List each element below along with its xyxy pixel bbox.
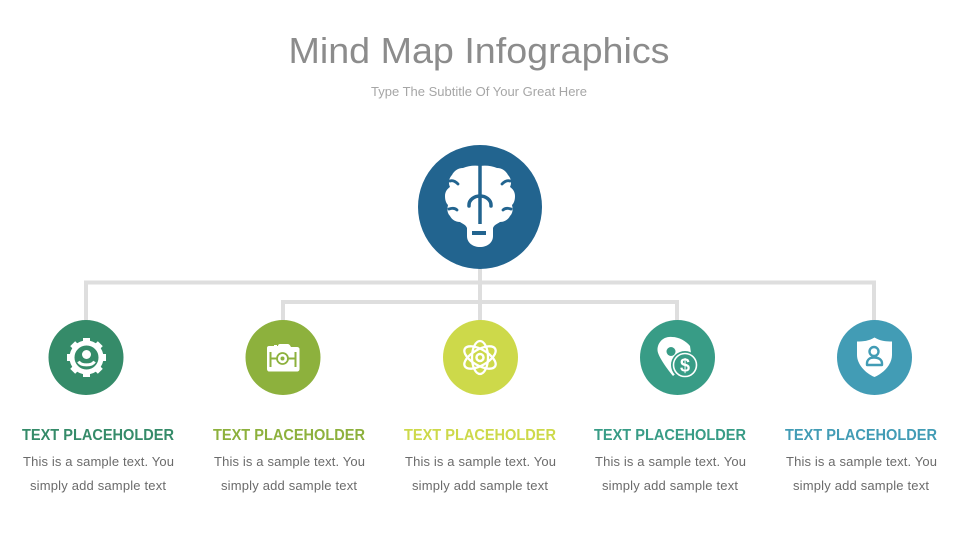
node 3: atom (443, 320, 518, 395)
node 2: camera (246, 320, 320, 395)
text block 4 (594, 427, 746, 493)
text block 2 (213, 427, 365, 493)
icon: brain bulb (445, 165, 515, 247)
text block 3: This is a sample text. You (405, 454, 556, 469)
text block 2: TEXT PLACEHOLDER (213, 427, 365, 444)
text block 5: simply add sample text (793, 478, 929, 493)
text block 4: This is a sample text. You (595, 454, 746, 469)
connector lines (86, 262, 874, 322)
text block 5: TEXT PLACEHOLDER (785, 427, 937, 444)
text block 2: simply add sample text (221, 478, 357, 493)
text block 5: This is a sample text. You (786, 454, 937, 469)
node 1: gear (48, 320, 124, 395)
icon: map pin with dollar: $ (680, 356, 690, 376)
icon: atom (461, 341, 499, 374)
text block 2: This is a sample text. You (214, 454, 365, 469)
text block 1: This is a sample text. You (23, 454, 174, 469)
text block 4: simply add sample text (602, 478, 738, 493)
central brain bulb node (418, 145, 542, 269)
text block 1 (22, 427, 174, 493)
text block 3: TEXT PLACEHOLDER (404, 427, 556, 444)
text block 1: TEXT PLACEHOLDER (22, 427, 174, 444)
icon: shield with person (857, 338, 892, 377)
node 4: location with dollar (640, 320, 715, 395)
text block 1: simply add sample text (30, 478, 166, 493)
text block 5 (785, 427, 937, 493)
node 5: shield (837, 320, 912, 395)
text block 3: simply add sample text (412, 478, 548, 493)
text block 4: TEXT PLACEHOLDER (594, 427, 746, 444)
icon: gear with person (67, 338, 106, 377)
subtitle: Type The Subtitle Of Your Great Here (371, 84, 587, 99)
text block 3 (404, 427, 556, 493)
title: Mind Map Infographics (288, 30, 670, 71)
icon: camera (267, 344, 300, 372)
